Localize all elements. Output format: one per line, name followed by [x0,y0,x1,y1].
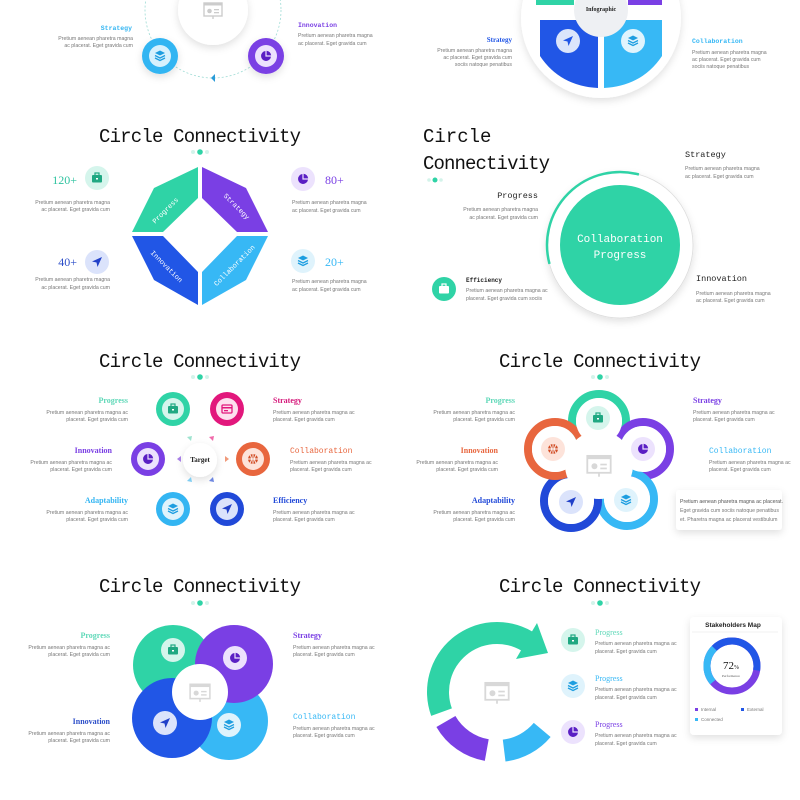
text: Progress: placerat. Eget gravida cum [453,417,515,423]
stat 80+: Pretium aenean pharetra magna [292,200,367,206]
slide 7: overlapping circles [28,576,375,760]
text: Strategy: Pretium aenean pharetra magna ac [693,410,775,416]
dots [191,149,209,155]
text: Strategy: ac placerat. Eget gravida cum [685,174,754,180]
stat 20+: ac placerat. Eget gravida cum [292,287,361,293]
slide 3: octagon [35,126,367,305]
dots [427,178,443,182]
text: Strategy: placerat. Eget gravida cum [693,417,755,423]
slide 8: cycle arrow + stakeholders [427,576,782,762]
title: Circle Connectivity [99,126,301,148]
stat 120+: ac placerat. Eget gravida cum [41,207,110,213]
text: Adaptability: Pretium aenean pharetra magna ac [433,510,515,516]
text: Innovation: Pretium aenean pharetra magna [696,291,771,297]
text: Progress [463,191,538,221]
text: Adaptability [433,496,515,523]
title: Circle Connectivity [499,351,701,373]
text: Collaboration: placerat. Eget gravida cum [290,467,352,473]
stat 20+ [291,249,367,293]
efficiency item [432,277,548,302]
arrow marker [211,74,215,82]
text: Innovation: Innovation [298,22,337,29]
text: Strategy: placerat. Eget gravida cum [293,652,355,658]
slide 5: target hub [30,351,372,526]
text: Strategy: Pretium aenean pharetra magna [685,166,760,172]
legend: External [747,707,764,712]
text: Adaptability [46,496,128,523]
text: Collaboration [290,447,372,473]
stat 80+: ac placerat. Eget gravida cum [292,208,361,214]
text: Progress: placerat. Eget gravida cum [48,652,110,658]
legend [695,707,764,722]
text: Strategy: Pretium aenean pharetra magna [437,48,512,54]
text: Strategy: Strategy [685,150,726,160]
title: Connectivity [423,153,550,175]
text: Innovation [696,274,771,304]
legend: Connected [701,717,723,722]
text: Adaptability: Pretium aenean pharetra magna ac [46,510,128,516]
text: Strategy: ac placerat. Eget gravida cum [443,55,512,61]
text: Strategy: Pretium aenean pharetra magna ac [293,645,375,651]
text: Progress: Pretium aenean pharetra magna ac [433,410,515,416]
text: Strategy [273,396,355,423]
octagon chart: Strategy [221,193,250,222]
octagon chart: Collaboration [213,244,257,288]
text: Strategy: placerat. Eget gravida cum [273,417,335,423]
callout card: et. Pharetra magna ac placerat vestibulum [680,517,777,523]
text: Innovation: Pretium aenean pharetra magna ac [28,731,110,737]
title: Circle Connectivity [99,351,301,373]
octagon chart [132,167,268,305]
item 3: Progress [595,720,623,729]
dots [191,374,209,380]
text: Collaboration: Pretium aenean pharetra magna ac [293,726,375,732]
text: Strategy [58,25,133,49]
text: Collaboration: placerat. Eget gravida cum [709,467,771,473]
stat 120+: 120+ [52,173,77,187]
text: Progress: ac placerat. Eget gravida cum [469,215,538,221]
text: Collaboration: placerat. Eget gravida cum [293,733,355,739]
slide 2: puzzle circle [437,0,767,98]
text: Innovation: ac placerat. Eget gravida cum [696,298,765,304]
text: Collaboration: Pretium aenean pharetra magna ac [290,460,372,466]
efficiency item: Efficiency [466,277,502,284]
text: Collaboration: ac placerat. Eget gravida cum [692,57,761,63]
octagon chart: Progress [152,197,181,226]
text: Innovation: Pretium aenean pharetra magna ac [416,460,498,466]
icon: layers blue [142,38,178,74]
stakeholders card: Stakeholders Map [705,622,761,629]
stat 80+ [291,167,367,214]
item 2: placerat. Eget gravida cum [595,695,657,701]
text: Efficiency [273,496,355,523]
dashed ring [145,0,281,78]
four circles diagram [132,625,273,760]
item 2: Pretium aenean pharetra magna ac [595,687,677,693]
slide 4: collaboration progress [423,126,771,318]
stat 40+: 40+ [58,255,77,269]
central circle: Collaboration [577,234,663,246]
title: Circle Connectivity [99,576,301,598]
text: Strategy [685,150,760,180]
text: Progress: placerat. Eget gravida cum [66,417,128,423]
text: Collaboration [692,38,767,70]
text: Innovation: placerat. Eget gravida cum [48,738,110,744]
puzzle disc [521,0,681,98]
text: Innovation: Innovation [696,274,747,284]
text: Progress: Progress [486,396,515,405]
text: Efficiency: placerat. Eget gravida cum [273,517,335,523]
title [423,126,550,175]
text: Innovation: Innovation [73,717,111,726]
text: Innovation [416,446,499,473]
slide 6: flower rings [416,351,791,530]
text: Adaptability: Adaptability [472,496,515,505]
stakeholders card [690,617,782,735]
stat 20+: 20+ [325,255,344,269]
text: Innovation: Innovation [75,446,113,455]
text: Innovation: Pretium aenean pharetra magna ac [30,460,112,466]
text: Innovation: Innovation [461,446,499,455]
text: Innovation [28,717,111,744]
cycle arrow [427,622,551,762]
text: Progress: Pretium aenean pharetra magna ac [28,645,110,651]
title: Circle [423,126,491,148]
text: Adaptability: placerat. Eget gravida cum [453,517,515,523]
text: Innovation: Pretium aenean pharetra magna [298,33,373,39]
item 1 [561,628,677,655]
text: Progress: Progress [99,396,128,405]
stat 80+: 80+ [325,173,344,187]
text: Progress: Pretium aenean pharetra magna ac [46,410,128,416]
hub diagram: Target [190,456,210,464]
item 3 [561,720,677,747]
callout card [676,490,783,530]
central circle [547,172,693,318]
flower diagram [528,394,670,528]
dots [191,600,209,606]
icon: pie purple [248,38,284,74]
callout card: Eget gravida cum sociis natoque penatibus [680,508,779,514]
item 1: placerat. Eget gravida cum [595,649,657,655]
text: Collaboration: Collaboration [692,38,743,45]
dots [591,600,609,606]
text: Strategy: Strategy [293,631,322,640]
text: Collaboration: Collaboration [709,447,772,456]
text: Adaptability: placerat. Eget gravida cum [66,517,128,523]
puzzle disc: Infographic [586,7,617,13]
text: Strategy: Strategy [693,396,722,405]
stat 40+ [35,250,110,291]
octagon chart: Innovation [148,250,183,285]
text: Efficiency: Pretium aenean pharetra magna ac [273,510,355,516]
item 3: Pretium aenean pharetra magna ac [595,733,677,739]
text: Progress [433,396,515,423]
text: Strategy: ac placerat. Eget gravida cum [64,43,133,49]
text: Collaboration: Pretium aenean pharetra magna ac [709,460,791,466]
text: Strategy: Pretium aenean pharetra magna [58,36,133,42]
text: Progress: Progress [81,631,110,640]
slide 1: partial circle cycle [58,0,373,82]
text: Progress [46,396,128,423]
text: Progress: Progress [497,191,538,201]
hub diagram [131,392,270,526]
efficiency item: Pretium aenean pharetra magna ac [466,288,548,294]
item 2: Progress [595,674,623,683]
text: Strategy: Strategy [273,396,302,405]
stat 40+: Pretium aenean pharetra magna [35,277,110,283]
text: Progress: Pretium aenean pharetra magna [463,207,538,213]
stat 40+: ac placerat. Eget gravida cum [41,285,110,291]
efficiency item: placerat. Eget gravida cum sociis [466,296,543,302]
callout card: Pretium aenean pharetra magna ac placerat. [680,499,783,505]
text: Adaptability: Adaptability [85,496,128,505]
text: Collaboration: Collaboration [293,713,356,722]
text: Innovation: placerat. Eget gravida cum [50,467,112,473]
legend: Internal [701,707,716,712]
central circle: Progress [594,250,646,262]
item 3: placerat. Eget gravida cum [595,741,657,747]
text: Collaboration: Collaboration [290,447,353,456]
donut chart: Performance [722,674,740,678]
text: Strategy [437,36,512,68]
text: Collaboration: sociis natoque penatibus [692,64,750,70]
text: Innovation [30,446,113,473]
text: Innovation [298,22,373,47]
text: Strategy [693,396,775,423]
text: Efficiency: Efficiency [273,496,307,505]
item 1: Progress [595,628,623,637]
text: Strategy: Pretium aenean pharetra magna ac [273,410,355,416]
text: Collaboration [709,447,791,473]
text: Strategy: Strategy [101,25,132,32]
center circle with board icon [178,0,248,45]
text: Progress [28,631,110,658]
text: Collaboration: Pretium aenean pharetra magna [692,50,767,56]
text: Innovation: ac placerat. Eget gravida cum [298,41,367,47]
donut chart: 72% [723,660,739,672]
item 1: Pretium aenean pharetra magna ac [595,641,677,647]
donut chart [707,641,757,691]
text: Collaboration [293,713,375,739]
dots [591,374,609,380]
stat 120+: Pretium aenean pharetra magna [35,200,110,206]
text: Strategy: sociis natoque penatibus [455,62,512,68]
stat 120+ [35,166,110,213]
stat 20+: Pretium aenean pharetra magna [292,279,367,285]
text: Strategy: Strategy [487,36,512,44]
text: Innovation: placerat. Eget gravida cum [436,467,498,473]
item 2 [561,674,677,701]
text: Strategy [293,631,375,658]
title: Circle Connectivity [499,576,701,598]
